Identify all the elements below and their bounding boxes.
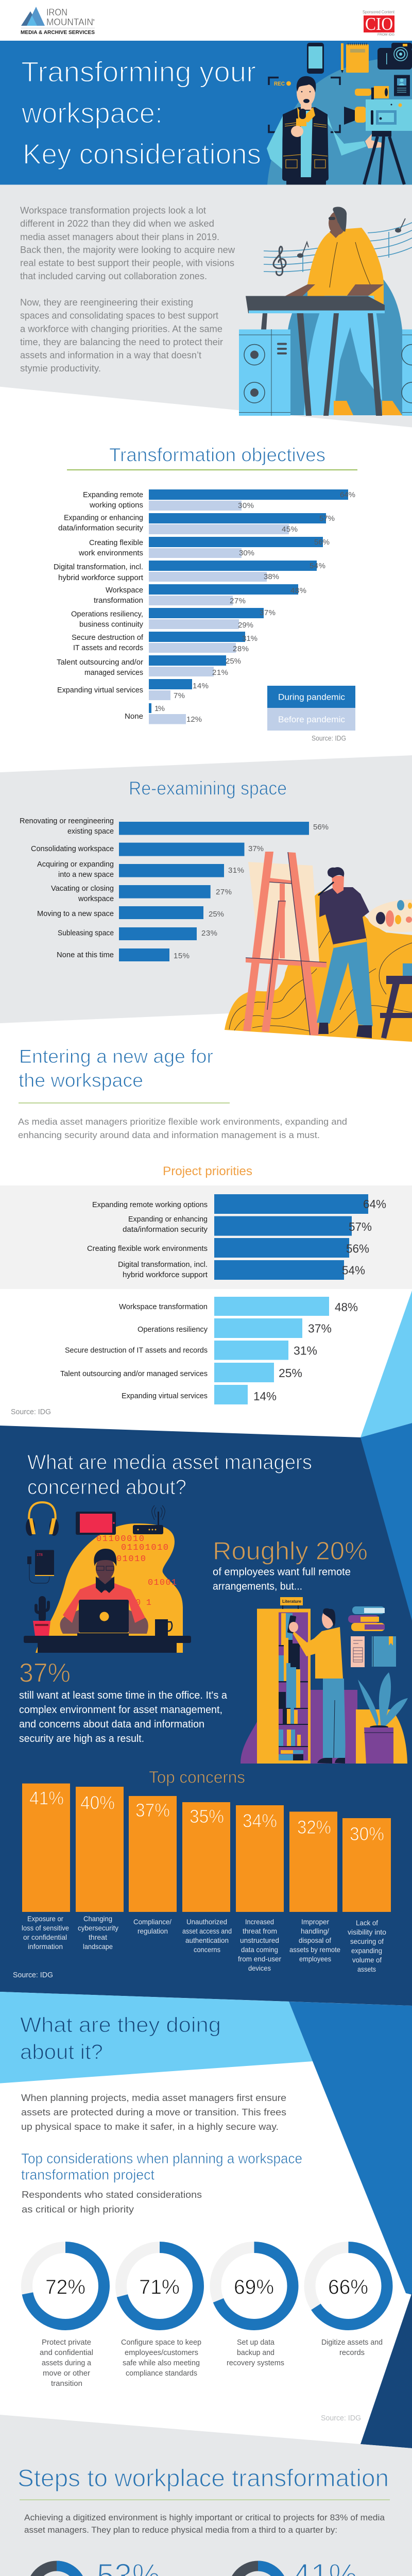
icon: router (133, 1505, 165, 1534)
bar values: 38% (264, 572, 279, 581)
callout: roughly 20%: arrangements, but... (213, 1581, 302, 1592)
bar chart: space plans: Subleasing space (58, 929, 114, 938)
bar labels: transformation (94, 596, 143, 605)
logo: Iron Mountain: IRON (46, 7, 67, 18)
bar chart: space plans: None at this time (57, 951, 114, 959)
text block: intro paragraph 2: stymie productivity. (20, 363, 101, 374)
sign: literature: Literature (282, 1599, 302, 1604)
icon: potted plant (358, 1672, 408, 1764)
bar values: 56% (314, 538, 330, 547)
bar values (154, 490, 355, 724)
bar values: 31% (242, 634, 258, 643)
text block: Achieving a digitized environment is highly important or critical to projects for 83% of media (24, 2513, 385, 2522)
bar chart: project priorities: 57% (349, 1220, 372, 1233)
text block: assets are protected during a move or transition. This frees (21, 2107, 286, 2117)
title: Transforming your (21, 56, 256, 88)
header with logos (21, 7, 395, 37)
video camera on tripod (344, 86, 412, 184)
donut chart: 69%: recovery systems (227, 2359, 284, 2367)
palette (368, 900, 412, 932)
donut chart: 66%: 66% (328, 2276, 368, 2299)
bar labels: securing of (350, 1937, 384, 1945)
bar chart: project priorities: 14% (253, 1389, 277, 1403)
bar values: 30% (239, 549, 254, 557)
icon: external drive: 1TB (37, 1553, 43, 1557)
callout: roughly 20%: of employees want full remote (213, 1567, 351, 1578)
text block: intro paragraph 2: assets and information in a way that doesn’t (20, 350, 201, 361)
man with laptop (60, 1549, 148, 1636)
title: workspace: (21, 97, 163, 129)
bar labels: Workspace (106, 586, 143, 595)
bar labels: cybersecurity (78, 1924, 118, 1932)
bar chart: project priorities: 31% (294, 1344, 317, 1358)
bar values: 45% (282, 525, 298, 534)
bar chart: space plans: into a new space (58, 870, 114, 879)
bar chart: project priorities: 25% (279, 1366, 302, 1380)
bar chart: project priorities: Expanding virtual services (122, 1392, 208, 1400)
source note: Source: IDG (11, 1408, 51, 1416)
musician (285, 207, 402, 415)
bar values: 64% (340, 490, 355, 499)
binary digits: 01010 (116, 1554, 146, 1564)
heading: Entering a new age for (19, 1046, 213, 1067)
donut chart: 71% (121, 2247, 201, 2378)
bar chart: space plans: 56% (313, 823, 329, 832)
bar chart: project priorities: data/information security (123, 1225, 208, 1234)
text block: As media asset managers prioritize flexible work environments, expanding and (18, 1116, 347, 1127)
donut chart: 72%: 72% (45, 2276, 85, 2299)
bar chart: objectives (54, 489, 355, 724)
bar labels: threat from (243, 1927, 277, 1935)
callout: 37% (19, 1658, 228, 1744)
source note: Source: IDG (321, 2414, 361, 2422)
source note: Source: IDG (312, 734, 346, 742)
stat: 41% technology (233, 2556, 396, 2576)
bar values: 21% (212, 668, 228, 677)
bar chart: project priorities: 54% (342, 1264, 365, 1277)
text block: intro paragraph 1: Workspace transformation projects look a lot (20, 206, 206, 216)
heading: concerned about? (27, 1476, 186, 1499)
bar chart: space plans: Vacating or closing (51, 884, 114, 893)
bar labels: Increased (245, 1918, 274, 1926)
icon: phone (307, 43, 324, 74)
bar labels: Compliance/ (133, 1918, 171, 1926)
illustration: musician at keyboard (239, 207, 412, 416)
text block: intro paragraph 1 (20, 206, 235, 281)
bar labels: None (125, 712, 143, 721)
text block: intro paragraph 2: Now, they are reengineering their existing (20, 297, 193, 308)
bar labels: disposal of (299, 1936, 331, 1944)
text block: respondents: Respondents who stated considerations (22, 2189, 202, 2200)
callout: 37%: and concerns about data and information (19, 1719, 204, 1730)
icon: paper form (351, 1636, 365, 1667)
shelf books (279, 1613, 308, 1760)
donut chart: 69%: backup and (237, 2348, 274, 2357)
bar labels: hybrid workforce support (58, 573, 144, 582)
bar labels: Talent outsourcing and/or (57, 658, 143, 667)
panel: hero (0, 41, 412, 184)
bar chart: top concerns (22, 1784, 391, 1973)
illustration: reporter and camera (267, 43, 412, 184)
heading (27, 1451, 312, 1499)
REC indicator: REC (274, 81, 285, 87)
donut chart: 71%: employees/customers (125, 2348, 198, 2357)
text block (18, 1116, 347, 1140)
bar chart: space plans: existing space (67, 827, 114, 836)
speaker right (402, 329, 412, 416)
donut chart: 69%: 69% (234, 2276, 274, 2299)
bar labels: authentication (185, 1936, 229, 1944)
heading: about it? (20, 2040, 103, 2064)
text block: intro paragraph 1: Back then, the majority were looking to acquire new (20, 245, 235, 255)
icon: treble clef (273, 246, 286, 275)
bar labels: Unauthorized (186, 1918, 227, 1926)
binary digits: 01 (135, 1598, 151, 1608)
bar chart: project priorities: Expanding or enhancing (128, 1215, 208, 1224)
bar labels: devices (248, 1964, 271, 1972)
bar labels (54, 490, 144, 721)
legend: Before pandemic (278, 715, 345, 724)
source note: Source: IDG (13, 1971, 53, 1979)
bar labels: IT assets and records (73, 643, 143, 652)
bar chart: space plans: 27% (216, 888, 232, 896)
bar chart: top concerns: 37% (135, 1800, 170, 1821)
callout: roughly 20%: Roughly 20% (213, 1537, 368, 1565)
bar labels: employees (299, 1955, 331, 1963)
bar labels: unstructured (240, 1936, 279, 1944)
text block: asset managers. They plan to reduce physical media from a third to a quarter by: (24, 2526, 337, 2535)
subheading: top concerns: Top concerns (149, 1768, 245, 1787)
donut chart: 71%: Configure space to keep (121, 2338, 201, 2347)
keyboard desk (246, 296, 385, 416)
bar labels: data coming (241, 1945, 278, 1954)
bar labels: expanding (351, 1946, 382, 1955)
bar chart: project priorities: 37% (308, 1322, 332, 1335)
legend: During pandemic (278, 692, 346, 702)
heading: What are media asset managers (27, 1451, 312, 1474)
bar chart: project priorities: Operations resiliency (138, 1325, 208, 1334)
panel: transformation objectives (54, 444, 357, 742)
bar labels: Expanding virtual services (57, 686, 143, 694)
donut chart: 72%: move or other (43, 2369, 90, 2378)
bar chart: top concerns: 35% (190, 1806, 224, 1827)
speaker left (239, 329, 290, 416)
subheading: Project priorities (163, 1164, 252, 1178)
person (287, 1608, 346, 1764)
heading: Steps to workplace transformation (18, 2464, 389, 2492)
subheading (21, 2150, 302, 2183)
bar labels: Creating flexible (89, 538, 143, 547)
donut chart: 66%: records (339, 2348, 365, 2357)
icon: ID card (394, 75, 410, 96)
bar labels: Lack of (356, 1919, 378, 1927)
panel: re-examining space (0, 755, 412, 1042)
callout: 37%: 37% (19, 1658, 71, 1688)
text block: respondents (22, 2189, 202, 2214)
logo: CIO sponsored content (363, 10, 395, 37)
bar labels: managed services (84, 668, 143, 677)
bar values: 27% (230, 597, 246, 605)
bar labels: Changing (83, 1914, 112, 1923)
illustration: painter at easel (225, 852, 412, 1042)
text block (21, 2092, 286, 2132)
bar chart: project priorities: 48% (335, 1300, 358, 1314)
heading: What are they doing (20, 2013, 221, 2037)
bar chart: top concerns: 32% (297, 1817, 331, 1838)
bar chart: top concerns: 30% (350, 1823, 384, 1844)
bar labels: Exposure or (27, 1914, 63, 1923)
logo: CIO sponsored content: CIO (365, 14, 393, 34)
donut chart: 72%: assets during a (42, 2359, 92, 2367)
heading: Transformation objectives (109, 444, 325, 466)
bar labels: work environments (78, 549, 143, 557)
donut chart: 66% (310, 2247, 387, 2357)
donut chart: 66%: Digitize assets and (321, 2338, 383, 2347)
bar chart: project priorities: 56% (346, 1242, 369, 1255)
bar chart: top concerns: 34% (243, 1810, 277, 1832)
panel: introduction (0, 184, 412, 428)
title: Key considerations (23, 138, 261, 170)
panel: new age section (0, 1046, 412, 1437)
bar values: 48% (290, 586, 306, 595)
bar labels: from end-user (238, 1955, 281, 1963)
text block: enhancing security around data and information management is a must. (18, 1130, 320, 1140)
bar values: 29% (238, 621, 253, 630)
bar labels: information (28, 1942, 63, 1951)
icon: mug (155, 1619, 172, 1636)
text block: up physical space to make it safer, in a highly secure way. (21, 2121, 279, 2132)
donut chart: 71%: compliance standards (126, 2369, 197, 2378)
bar chart: project priorities: Expanding remote working options (92, 1200, 208, 1209)
bar labels: threat (89, 1933, 107, 1941)
bar labels: data/information security (58, 523, 143, 533)
text block: When planning projects, media asset managers first ensure (21, 2092, 286, 2103)
logo: Iron Mountain: MOUNTAIN (46, 17, 93, 27)
donut chart: 71%: safe while also meeting (123, 2359, 200, 2367)
bar values: 28% (233, 645, 249, 653)
callout: 37%: complex environment for asset management, (19, 1704, 222, 1716)
binary digits: 01001 (148, 1578, 177, 1588)
bar labels: Expanding remote (83, 490, 143, 499)
bar chart: project priorities: Workspace transformation (119, 1302, 208, 1311)
icon: cactus (33, 1596, 50, 1636)
bar labels: volume of (352, 1956, 382, 1964)
donut chart: 72%: transition (51, 2379, 82, 2388)
bar chart: project priorities: Digital transformation, incl. (118, 1260, 208, 1269)
icon: blue book (372, 1636, 396, 1667)
bar values: 57% (319, 514, 335, 523)
bar labels: Secure destruction of (72, 633, 144, 642)
bar values: 54% (310, 562, 325, 570)
bar chart: space plans: 37% (248, 844, 264, 853)
bar values: 12% (186, 715, 202, 724)
bar chart: space plans (20, 817, 329, 961)
bar labels: loss of sensitive (22, 1924, 69, 1932)
bar labels: Expanding or enhancing (64, 513, 143, 522)
icon: notepad and pencil (341, 43, 369, 73)
binary digits: 01100010 (96, 1534, 144, 1544)
icon: book stack (348, 1606, 385, 1631)
panel: what are they doing (0, 1992, 412, 2448)
bar chart: space plans: 15% (174, 952, 190, 960)
bar chart: top concerns: 41% (29, 1788, 64, 1809)
bar chart: space plans: Moving to a new space (37, 909, 114, 918)
icon: tablet (76, 1512, 116, 1535)
logo: Iron Mountain (21, 7, 95, 36)
text block: intro paragraph 2: spaces and consolidating spaces to best support (20, 311, 218, 321)
heading: Re-examining space (129, 778, 287, 799)
title (21, 56, 261, 170)
bar chart: space plans: 25% (209, 910, 224, 919)
bar chart: top concerns: 40% (80, 1792, 115, 1814)
icon: music notes (297, 218, 405, 258)
donut chart: 71%: 71% (139, 2276, 180, 2299)
bar labels: business continuity (79, 620, 143, 629)
text block: intro paragraph 1: real estate to best support their people, with visions (20, 258, 234, 268)
bar chart: project priorities: Creating flexible work environments (87, 1244, 208, 1253)
reporter (267, 76, 384, 184)
bar labels: assets (357, 1965, 376, 1973)
logo: Iron Mountain: MEDIA & ARCHIVE SERVICES (21, 30, 95, 36)
bar values: 7% (174, 691, 185, 700)
logo: CIO sponsored content: Sponsored Content (363, 10, 395, 14)
logo: Iron Mountain: ® (93, 19, 95, 22)
bar labels (22, 1914, 386, 1973)
bar chart: project priorities: 64% (363, 1197, 386, 1211)
bar labels: handling/ (301, 1927, 329, 1935)
binary digits: 01101010 (121, 1543, 168, 1553)
heading (19, 1046, 213, 1091)
panel: steps to workplace transformation (0, 2415, 412, 2576)
icon: headphones (26, 1502, 59, 1536)
callout: roughly 20% (213, 1537, 368, 1592)
heading: the workspace (19, 1070, 143, 1091)
bar values: 14% (193, 682, 209, 690)
bar labels: Improper (301, 1918, 329, 1926)
illustration: person at bookshelf (241, 1597, 408, 1764)
text block: intro paragraph 2 (20, 297, 223, 374)
bar chart: project priorities (60, 1194, 386, 1404)
donut chart: 69%: Set up data (237, 2338, 275, 2347)
panel: concerns (0, 1423, 412, 2006)
bar chart: space plans: 31% (228, 866, 244, 875)
bar labels: visibility into (348, 1928, 386, 1936)
legend (267, 686, 355, 731)
bar labels: concerns (194, 1945, 220, 1954)
callout: 37%: still want at least some time in the office. It's a (19, 1690, 228, 1701)
text block: respondents: as critical or high priority (22, 2204, 134, 2214)
text block: intro paragraph 1: different in 2022 than they did when we asked (20, 218, 214, 229)
donut chart: 72% (27, 2247, 104, 2388)
bar labels: asset access and (182, 1927, 232, 1935)
bar chart: space plans: Renovating or reengineering (20, 817, 114, 825)
donut chart: 72%: and confidential (40, 2348, 93, 2357)
text block: intro paragraph 2: time, they are balancing the need to protect their (20, 337, 223, 347)
sign: literature (280, 1597, 303, 1609)
bar chart: space plans: Consolidating workspace (31, 844, 114, 853)
stat: 53% digitizing (32, 2556, 160, 2576)
bar values: 1% (154, 704, 165, 713)
text block: intro paragraph 1: media asset managers about their plans in 2019. (20, 232, 219, 242)
icon: external drive (27, 1550, 54, 1583)
bar values: 37% (260, 608, 276, 617)
bar values: 30% (238, 501, 254, 510)
subheading: transformation project (21, 2167, 154, 2183)
highlight band (0, 1185, 412, 1289)
bar chart: space plans: 23% (201, 929, 217, 938)
bar labels: or confidential (23, 1933, 67, 1941)
bar labels: regulation (138, 1927, 168, 1935)
bar chart: project priorities: Secure destruction of IT assets and records (65, 1346, 208, 1355)
stool with paint (380, 963, 412, 1039)
bar chart: project priorities: hybrid workforce support (123, 1270, 208, 1279)
logo: CIO sponsored content: FROM IDG (377, 33, 394, 37)
bar values: 25% (226, 657, 241, 666)
bar labels: assets by remote (289, 1945, 340, 1954)
bar labels: landscape (83, 1942, 113, 1951)
bar labels: Operations resiliency, (71, 610, 143, 618)
subheading: Top considerations when planning a workspace (21, 2150, 302, 2166)
heading (20, 2013, 221, 2064)
painter (317, 867, 373, 1038)
text block (24, 2513, 385, 2535)
bar chart: space plans: Acquiring or expanding (37, 860, 114, 869)
donut chart: 72%: Protect private (42, 2338, 91, 2347)
desk (24, 1636, 191, 1653)
illustration: man at laptop (24, 1502, 191, 1653)
recording frame (269, 77, 340, 132)
bar chart: space plans: workspace (78, 894, 114, 903)
text block: intro paragraph 1: that included carving out collaboration zones. (20, 271, 207, 281)
icon: photo camera (377, 43, 412, 70)
bar labels: working options (89, 501, 143, 510)
callout: 37%: security are high as a result. (19, 1733, 144, 1744)
bar chart: project priorities: Talent outsourcing and/or managed services (60, 1369, 208, 1378)
binary digits (96, 1534, 177, 1608)
text block: intro paragraph 2: a workforce with changing priorities. At the same (20, 324, 222, 334)
bar labels: Digital transformation, incl. (54, 563, 143, 571)
donut chart: 69% (215, 2247, 293, 2367)
